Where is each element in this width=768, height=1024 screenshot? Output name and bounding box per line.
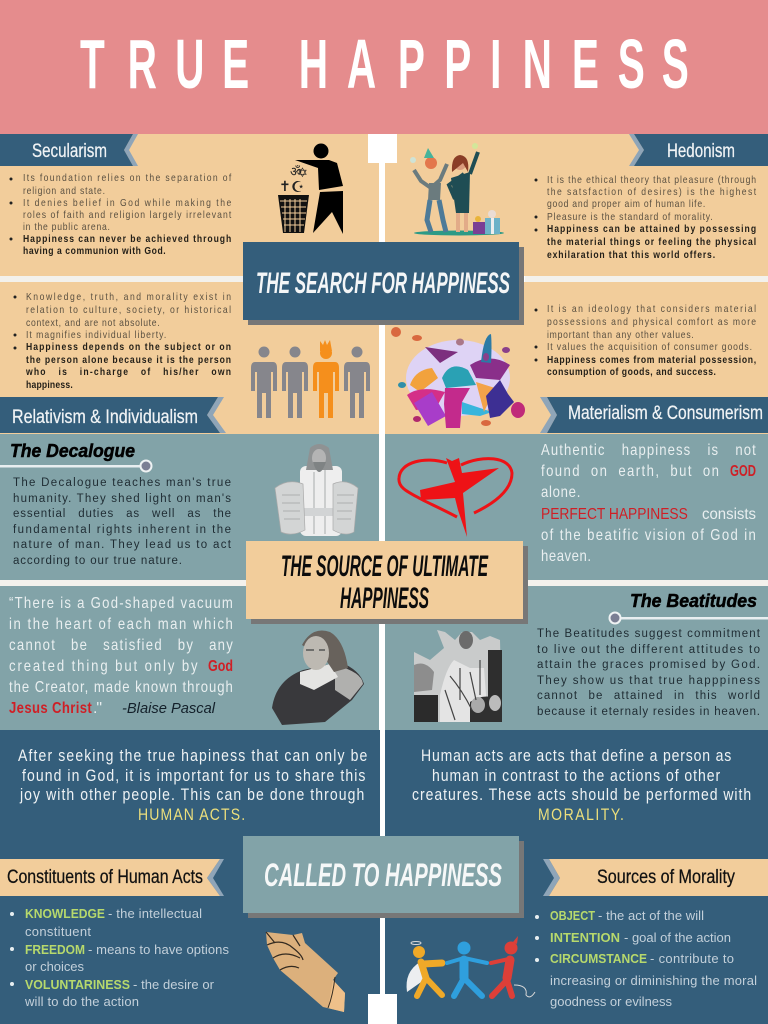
text: pascal quote: the Creator, made known through bbox=[9, 679, 233, 696]
text: decalogue bbox=[13, 477, 232, 567]
text: beatitudes: They show us that true happpiness bbox=[537, 675, 760, 687]
list: sources: OBJECT bbox=[550, 908, 595, 923]
panel: relativism bbox=[0, 282, 379, 434]
text: relativism: the person alone because it is the person bbox=[26, 354, 231, 366]
text: beatitudes: to live out the different attitudes to bbox=[537, 644, 760, 656]
icon: tug of war between angel and devil bbox=[407, 936, 535, 997]
text: relativism bbox=[25, 291, 231, 391]
text: secularism: roles of faith and religion largely irrelevant bbox=[23, 209, 232, 221]
text: beatitudes: attain the graces promised by God. bbox=[537, 659, 760, 671]
banner: the search for happiness: THE SEARCH FOR HAPPINESS bbox=[256, 267, 510, 300]
panel: morality bbox=[385, 730, 768, 1024]
list: sources: INTENTION bbox=[550, 930, 620, 945]
text: secularism: religion and state. bbox=[23, 185, 105, 197]
text: decalogue: The Decalogue teaches man's true bbox=[13, 477, 231, 489]
text: morality intro: Human acts are acts that define a person as bbox=[421, 747, 732, 765]
panel: decalogue bbox=[0, 434, 379, 580]
text: materialism: It is an ideology that considers material bbox=[547, 303, 756, 315]
title: TRUEHAPPINESS bbox=[80, 26, 689, 104]
panel: secularism bbox=[0, 134, 379, 276]
text: authentic happiness: PERFECT HAPPINESS bbox=[541, 506, 688, 523]
text: authentic happiness: alone. bbox=[541, 484, 580, 501]
text: authentic happiness: consists bbox=[702, 506, 756, 523]
list: constituents: - the intellectual bbox=[108, 906, 202, 921]
ribbon: relativism and individualism: Relativism & Individualism bbox=[12, 407, 198, 428]
bullets: relativism bbox=[14, 296, 16, 350]
banner: the source of ultimate happiness: HAPPINESS bbox=[340, 582, 429, 615]
text: human acts intro: joy with other people. This can be done through bbox=[19, 786, 364, 804]
text: secularism: It denies belief in God while making the bbox=[23, 197, 231, 209]
text: secularism: in the public arena. bbox=[23, 221, 110, 233]
text: decalogue: fundamental rights inherent in the bbox=[13, 524, 231, 536]
panel: pascal quote bbox=[0, 586, 379, 730]
text: pascal quote: God bbox=[208, 658, 233, 675]
text: materialism: important than any other values. bbox=[547, 329, 694, 341]
text: secularism: Its foundation relies on the separation of bbox=[23, 172, 232, 184]
ribbon: secularism: Secularism bbox=[32, 141, 107, 162]
list: constituents: will to do the action bbox=[24, 994, 139, 1009]
text: hedonism: good and proper aim of human life. bbox=[547, 198, 705, 210]
text: pascal quote: created thing but only by bbox=[9, 658, 198, 675]
ribbon: secularism bbox=[0, 134, 138, 166]
text: pascal quote: Jesus Christ bbox=[9, 700, 92, 717]
text: pascal quote: cannot be satisfied by any bbox=[9, 637, 233, 654]
banner: the source of ultimate happiness bbox=[246, 541, 528, 624]
text: morality intro: human in contrast to the actions of other bbox=[432, 767, 720, 785]
text: hedonism: It is the ethical theory that pleasure (through bbox=[547, 174, 756, 186]
list: constituents: KNOWLEDGE bbox=[25, 906, 105, 921]
top centre square bbox=[368, 134, 397, 163]
ribbon: constituents of human acts bbox=[0, 859, 224, 896]
list: constituents: - means to have options bbox=[88, 942, 230, 957]
text: morality intro: MORALITY. bbox=[538, 806, 624, 824]
panel: human acts bbox=[0, 730, 380, 1024]
list: sources bbox=[535, 908, 757, 1009]
ribbon: hedonism bbox=[629, 134, 768, 166]
text: hedonism: the satsfaction of desires) is the highest bbox=[547, 186, 756, 198]
icon: man throwing religious symbols in a bin: ☪ bbox=[291, 178, 304, 196]
text: human acts intro: HUMAN ACTS. bbox=[138, 806, 245, 824]
text: authentic happiness: Authentic happiness is not bbox=[541, 442, 756, 459]
panel: beatitudes bbox=[385, 586, 768, 730]
banner: the search for happiness bbox=[243, 242, 524, 325]
text: authentic happiness: of the beatific vision of God in bbox=[541, 527, 756, 544]
text: morality intro: creatures. These acts should be performed with bbox=[412, 786, 751, 804]
text: human acts intro: After seeking the true hapiness that can only be bbox=[18, 747, 367, 765]
panel: materialism bbox=[385, 282, 768, 434]
icon: man throwing religious symbols in a bin: ✝ bbox=[279, 179, 291, 195]
ribbon: materialism and consumerism bbox=[540, 397, 768, 433]
text: pascal quote: “There is a God-shaped vacuum bbox=[9, 595, 233, 612]
list: constituents: FREEDOM bbox=[25, 942, 85, 957]
text: relativism: who is in-charge of his/her own bbox=[25, 366, 231, 378]
icon: man throwing religious symbols in a bin: ✡ bbox=[297, 166, 308, 181]
text: materialism: It values the acquisition of consumer goods. bbox=[547, 341, 752, 353]
text: authentic happiness: found on earth, but on bbox=[541, 463, 719, 480]
text: hedonism: Pleasure is the standard of morality. bbox=[547, 211, 713, 223]
text: decalogue: essential duties as well as the bbox=[13, 508, 231, 520]
ribbon: sources of morality bbox=[543, 859, 768, 896]
text: beatitudes: cannot be attained in this world bbox=[537, 690, 760, 702]
text: pascal quote: -Blaise Pascal bbox=[122, 700, 216, 717]
icon: moses with tablets bbox=[275, 444, 358, 536]
text: relativism: Happiness depends on the subject or on bbox=[26, 341, 231, 353]
ribbon: sources of morality: Sources of Morality bbox=[597, 867, 735, 888]
list: constituents: or choices bbox=[25, 959, 84, 974]
text: pascal quote bbox=[9, 595, 233, 717]
text: hedonism bbox=[547, 174, 756, 261]
text: decalogue: humanity. They shed light on man's bbox=[13, 493, 231, 505]
icon: man throwing religious symbols in a bin bbox=[278, 144, 343, 234]
divider strips bbox=[0, 276, 768, 586]
icon: portrait of blaise pascal bbox=[272, 631, 364, 725]
list: constituents: - the desire or bbox=[133, 977, 215, 992]
banner: the source of ultimate happiness: THE SOURCE OF ULTIMATE bbox=[281, 550, 489, 583]
heading: the beatitudes: The Beatitudes bbox=[630, 591, 757, 611]
bullets: secularism bbox=[10, 178, 12, 240]
text: relativism: It magnifies individual liberty. bbox=[26, 329, 166, 341]
text: authentic happiness bbox=[541, 442, 756, 565]
text: beatitudes: because it eternaly resides in heaven. bbox=[537, 706, 760, 718]
list: constituents: constituent bbox=[25, 924, 91, 939]
text: hedonism: exhilaration that this world offers. bbox=[547, 249, 715, 261]
connector: decalogue bbox=[0, 460, 152, 472]
ribbon: constituents of human acts: Constituents of Human Acts bbox=[7, 867, 203, 888]
icon: man throwing religious symbols in a bin: ॐ bbox=[290, 165, 302, 180]
panel: hedonism bbox=[385, 134, 768, 276]
text: secularism: Happiness can never be achieved through bbox=[23, 233, 231, 245]
icon: sermon on the mount bbox=[414, 630, 502, 722]
list: constituents: VOLUNTARINESS bbox=[25, 977, 130, 992]
ribbon: hedonism: Hedonism bbox=[667, 141, 735, 162]
text: decalogue: nature of man. They lead us to act bbox=[13, 539, 232, 551]
icon: clasped hands bbox=[266, 932, 345, 1012]
list: sources: - goal of the action bbox=[624, 930, 731, 945]
list: sources: goodness or evilness bbox=[550, 994, 672, 1009]
text: materialism: possessions and physical comfort as more bbox=[547, 316, 756, 328]
list: sources: - contribute to bbox=[650, 951, 734, 966]
text: secularism: having a communion with God. bbox=[23, 245, 166, 257]
icon: group of people with one crowned bbox=[251, 340, 370, 418]
list: sources: CIRCUMSTANCE bbox=[550, 951, 647, 966]
text: relativism: context, and are not absolute. bbox=[26, 317, 160, 329]
text: human acts intro bbox=[18, 747, 367, 824]
bottom centre square bbox=[368, 994, 397, 1024]
list: sources: increasing or diminishing the moral bbox=[550, 973, 757, 988]
text: relativism: happiness. bbox=[26, 379, 73, 391]
list: constituents bbox=[10, 906, 230, 1009]
icon: two women celebrating bbox=[410, 143, 504, 236]
text: decalogue: according to our true nature. bbox=[13, 555, 182, 567]
banner: called to happiness: CALLED TO HAPPINESS bbox=[264, 857, 502, 893]
text: morality intro bbox=[412, 747, 751, 824]
bullets: hedonism bbox=[534, 178, 538, 232]
text: secularism bbox=[23, 172, 232, 257]
text: relativism: Knowledge, truth, and morality exist in bbox=[26, 291, 231, 303]
text: pascal quote: in the heart of each man which bbox=[9, 616, 233, 633]
text: hedonism: Happiness can be attained by possessing bbox=[547, 223, 756, 235]
text: beatitudes bbox=[537, 628, 761, 718]
text: materialism: Happiness comes from material possession, bbox=[547, 354, 756, 366]
text: hedonism: the material things or feeling the physical bbox=[547, 236, 756, 248]
icon: red heart with cross bbox=[399, 458, 512, 537]
list: sources: - the act of the will bbox=[598, 908, 704, 923]
text: beatitudes: The Beatitudes suggest commitment bbox=[537, 628, 761, 640]
text: materialism: consumption of goods, and success. bbox=[547, 366, 716, 378]
text: authentic happiness: heaven. bbox=[541, 548, 591, 565]
heading: the decalogue: The Decalogue bbox=[10, 441, 135, 461]
text: authentic happiness: GOD bbox=[730, 463, 756, 480]
icon: shoppers with bags and coins bbox=[391, 327, 525, 428]
text: materialism bbox=[547, 303, 756, 378]
text: human acts intro: found in God, it is important for us to share this bbox=[22, 767, 366, 785]
text: relativism: relation to culture, society, or historical bbox=[26, 304, 231, 316]
panel: authentic happiness bbox=[385, 434, 768, 580]
bullets: materialism bbox=[534, 308, 538, 362]
title band bbox=[0, 0, 768, 134]
banner: called to happiness bbox=[243, 836, 524, 918]
text: pascal quote: ." bbox=[93, 700, 102, 717]
ribbon: relativism and individualism bbox=[0, 397, 226, 433]
connector: beatitudes bbox=[610, 612, 768, 624]
